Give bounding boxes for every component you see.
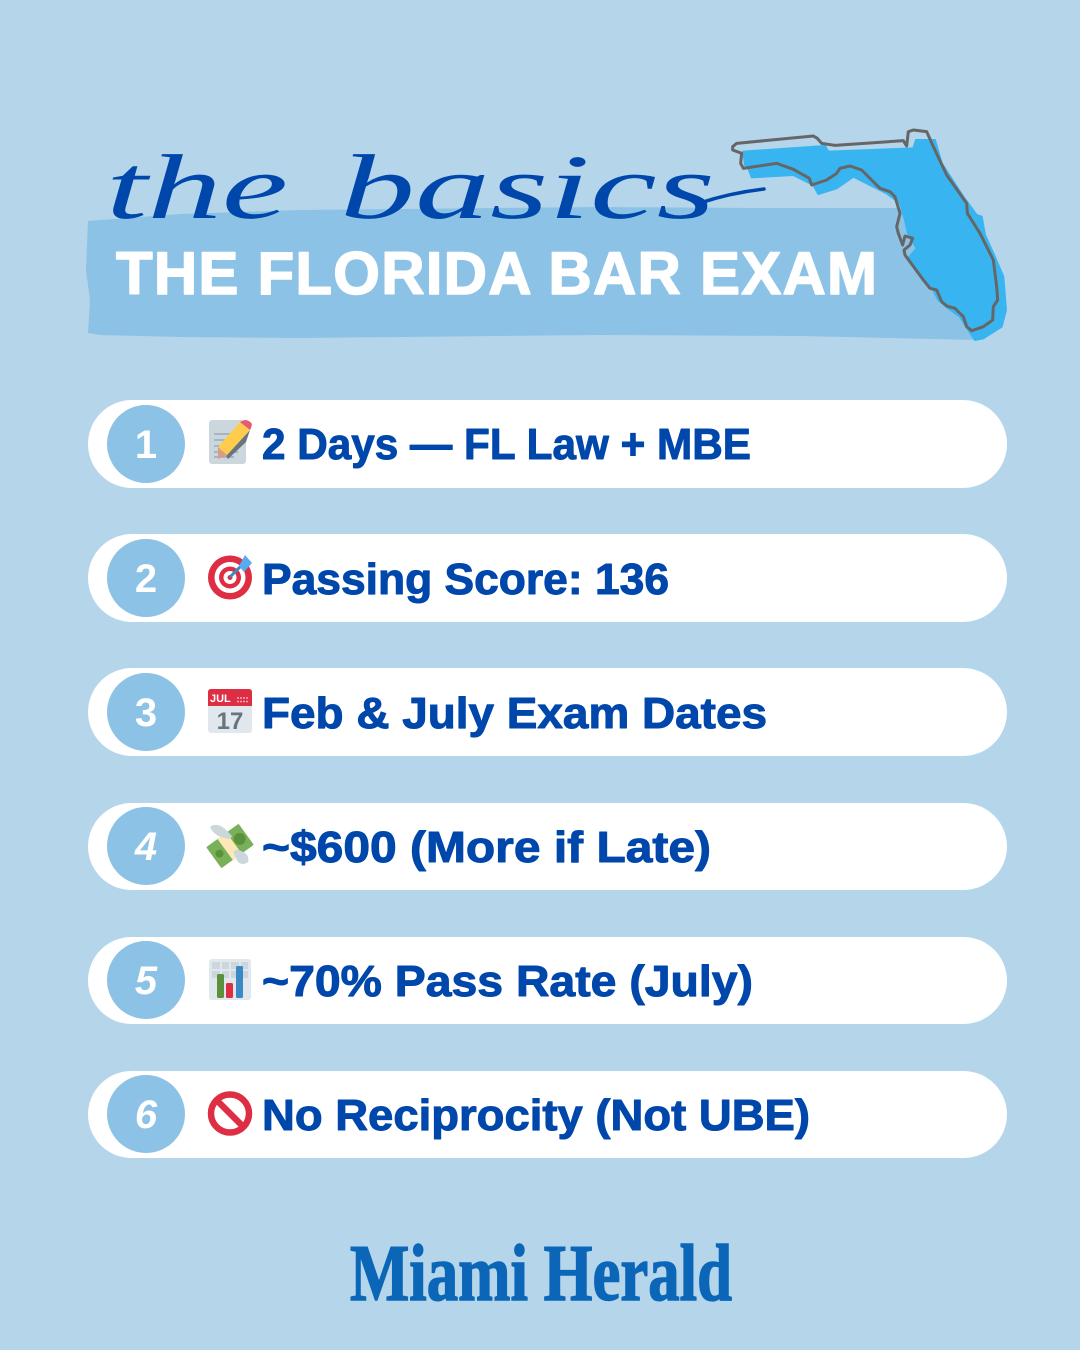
label: ~70% Pass Rate (July) [262,957,753,1006]
script title: the [106,136,288,238]
number badge [107,405,185,483]
label: ~$600 (More if Late) [262,823,711,872]
number badge: 3 [135,691,157,735]
main title: THE FLORIDA BAR EXAM [116,240,877,307]
item 6 [88,1071,1007,1158]
number badge: 5 [135,959,158,1003]
label: 2 Days — FL Law + MBE [262,420,751,469]
number badge [107,807,185,885]
label: No Reciprocity (Not UBE) [262,1091,810,1140]
number badge [107,673,185,751]
icon: bar chart [209,959,251,1000]
logo: Miami Herald: Miami Herald [350,1230,732,1318]
pill [88,400,1007,488]
icon: target and dart [208,555,252,600]
script title: basics [340,136,715,238]
item 4 [88,803,1007,890]
script title [106,136,764,238]
icon: calendar: 17 [217,708,243,735]
icon: memo and pencil [209,420,252,464]
label: Passing Score: 136 [262,555,669,604]
item 2 [88,534,1007,622]
florida map [733,130,1006,340]
pill [88,534,1007,622]
number badge [107,539,185,617]
item 1 [88,400,1007,488]
pill [88,803,1007,890]
pill [88,668,1007,756]
icon: calendar [208,689,252,735]
number badge: 2 [135,557,157,601]
number badge: 4 [134,825,157,869]
pill [88,1071,1007,1158]
number badge: 6 [135,1093,158,1137]
item 5 [88,937,1007,1024]
number badge: 1 [135,423,157,467]
number badge [107,1075,185,1153]
item 3 [88,668,1007,756]
label: Feb & July Exam Dates [262,689,767,738]
number badge [107,941,185,1019]
pill [88,937,1007,1024]
icon: prohibited sign [211,1094,249,1132]
header banner [86,130,1006,340]
icon: money with wings [206,824,254,868]
icon: calendar: JUL [210,693,231,705]
banner brush stroke [86,207,984,340]
